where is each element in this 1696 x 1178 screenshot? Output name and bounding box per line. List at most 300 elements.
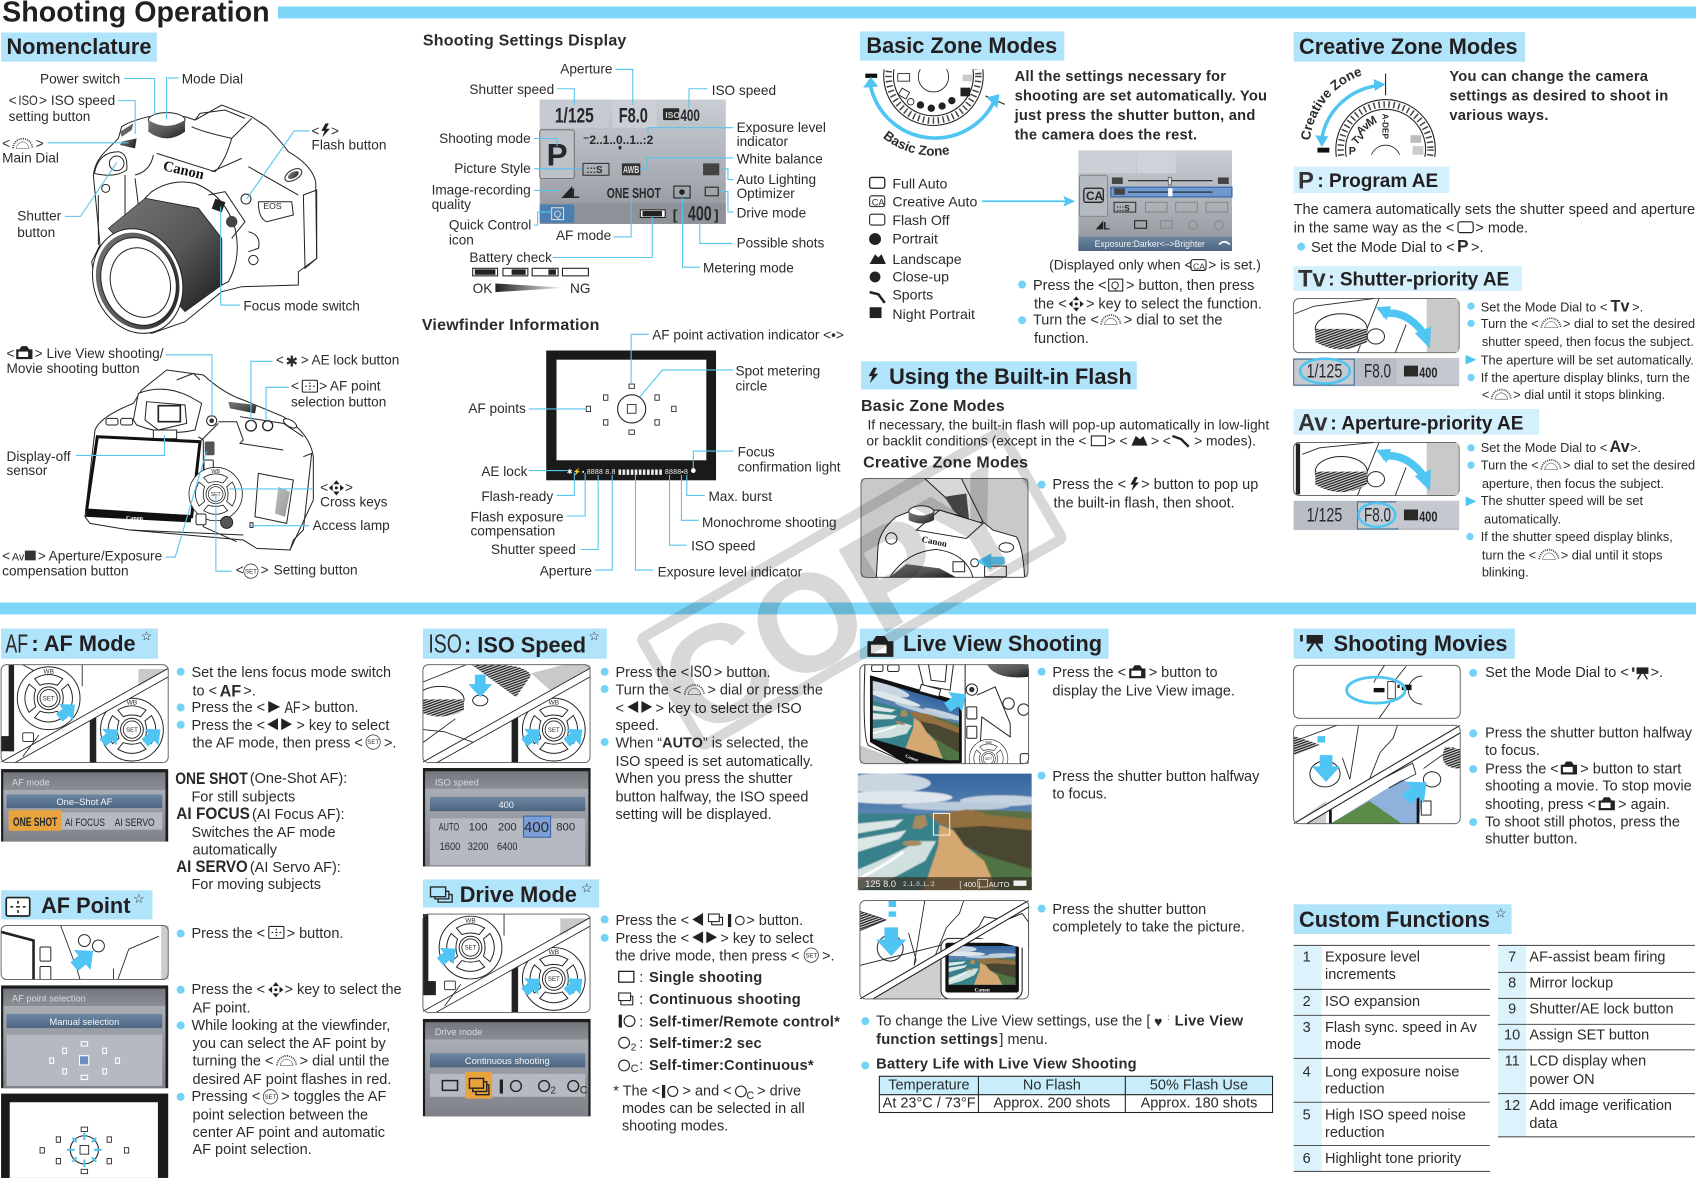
instructions bbox=[1018, 278, 1262, 347]
instructions: completely to take the picture. bbox=[1052, 919, 1245, 935]
instructions: Set the lens focus mode switch bbox=[191, 665, 391, 681]
labels: Metering mode bbox=[703, 261, 794, 276]
screen: drive mode bbox=[423, 1019, 591, 1116]
labels: indicator bbox=[737, 134, 789, 149]
labels: Max. burst bbox=[708, 489, 772, 504]
LCD screen bbox=[540, 100, 726, 226]
labels: Monochrome shooting bbox=[702, 515, 837, 530]
instructions bbox=[1469, 665, 1693, 848]
mode dial: creative zone: P bbox=[1349, 146, 1356, 158]
labels: ISO speed bbox=[712, 83, 776, 98]
labels: Aperture bbox=[540, 563, 592, 578]
labels: Battery check bbox=[469, 250, 552, 265]
instructions: > dial until the bbox=[300, 1053, 389, 1069]
instructions: Turn the < bbox=[1481, 457, 1539, 472]
instructions: Press the < bbox=[191, 700, 265, 716]
header bar bbox=[278, 7, 1696, 18]
intro text: the camera does the rest. bbox=[1015, 128, 1197, 144]
instructions: > dial to set the desired bbox=[1563, 316, 1695, 331]
labels: White balance bbox=[737, 151, 823, 166]
labels: ISO speed bbox=[51, 93, 115, 108]
screen: drive mode: 2 bbox=[551, 1086, 556, 1097]
instructions: > dial until it stops bbox=[1561, 547, 1662, 562]
instructions: To shoot still photos, press the bbox=[1485, 814, 1680, 830]
labels: AE lock bbox=[481, 464, 528, 479]
program AE: The camera automatically sets the shutter speed and aperture bbox=[1294, 202, 1695, 218]
LCD screen: 1/125 bbox=[555, 102, 594, 127]
quick control screen: L bbox=[1103, 220, 1110, 232]
instructions: > button to bbox=[1149, 665, 1218, 681]
live view photo: 2..1..0..1..:2 bbox=[903, 882, 935, 888]
instructions: >. bbox=[243, 684, 256, 700]
labels: > bbox=[319, 379, 327, 394]
instructions: turning the < bbox=[193, 1053, 273, 1069]
instructions: > key to select bbox=[296, 718, 389, 734]
table: functions 7-12: LCD display when bbox=[1529, 1053, 1646, 1069]
mode list bbox=[869, 176, 977, 323]
mode dial: creative zone: Tv bbox=[1350, 130, 1367, 148]
instructions: When you press the shutter bbox=[615, 771, 793, 787]
aperture-priority AE: : Aperture-priority AE bbox=[1330, 413, 1523, 434]
heading: live view shooting: Live View Shooting bbox=[903, 631, 1102, 656]
battery life table: 50% Flash Use bbox=[1150, 1077, 1248, 1093]
battery life table: At 23°C / 73°F bbox=[883, 1096, 976, 1112]
instructions: function. bbox=[1034, 331, 1089, 347]
table: functions 1-6: 1 bbox=[1303, 950, 1311, 966]
labels: Quick Control bbox=[449, 217, 531, 232]
heading: nomenclature: Nomenclature bbox=[6, 34, 151, 59]
viewfinder diagram: ✱⚡▪ 8888 8.8 ▮▮▮▮▮▮▮▮▮▮▮ 8888▪8 bbox=[567, 467, 688, 476]
instructions: When “AUTO” is selected, the bbox=[615, 735, 808, 751]
instructions: If the aperture display blinks, turn the bbox=[1481, 370, 1690, 385]
basic zone note: > < bbox=[1108, 433, 1128, 449]
battery life table: Approx. 200 shots bbox=[994, 1096, 1110, 1112]
LCD strip: aperture: 1/125 bbox=[1307, 504, 1342, 526]
footnote: shooting modes. bbox=[622, 1118, 728, 1134]
footnote bbox=[613, 1084, 805, 1134]
labels: < bbox=[9, 93, 17, 108]
instructions: >. bbox=[384, 735, 396, 751]
table: functions 7-12: 9 bbox=[1508, 1002, 1516, 1018]
instructions: > dial until it stops blinking. bbox=[1513, 387, 1665, 402]
AF mode descriptions: AI FOCUS bbox=[176, 805, 250, 823]
mode dial: creative zone bbox=[1301, 69, 1436, 158]
table: functions 7-12: 8 bbox=[1508, 976, 1516, 992]
table: functions 7-12: Add image verification bbox=[1529, 1098, 1672, 1114]
LCD strip: shutter speed: F8.0 bbox=[1364, 361, 1391, 383]
instructions: shooting, press < bbox=[1485, 797, 1596, 813]
labels: compensation button bbox=[2, 563, 129, 578]
LCD strip: shutter speed: 400 bbox=[1419, 365, 1437, 382]
basic zone note: If necessary, the built-in flash will pop-up automatically in low-light bbox=[867, 416, 1269, 432]
instructions: shutter button. bbox=[1485, 832, 1578, 848]
panel: creative zone modes bbox=[1293, 32, 1695, 580]
instructions: ISO bbox=[690, 663, 712, 681]
labels: Shutter speed bbox=[469, 82, 554, 97]
labels bbox=[432, 62, 826, 276]
mode list: Portrait bbox=[892, 231, 938, 247]
screen: drive mode: Drive mode bbox=[435, 1027, 482, 1037]
labels: > bbox=[331, 123, 339, 138]
table: functions 1-6: increments bbox=[1325, 967, 1396, 983]
table: functions 1-6: 6 bbox=[1303, 1151, 1311, 1167]
illustration: AF point button bbox=[1, 925, 169, 979]
instructions: Turn the < bbox=[615, 682, 681, 698]
LCD screen: AWB bbox=[623, 165, 639, 176]
leader lines bbox=[529, 334, 733, 570]
labels: > bbox=[261, 562, 269, 577]
footnote: > drive bbox=[757, 1084, 801, 1100]
battery check legend: OK bbox=[473, 281, 492, 296]
mode list: Landscape bbox=[892, 252, 962, 268]
instructions: shooting a movie. To stop movie bbox=[1485, 779, 1692, 795]
mode dial: basic zone bbox=[863, 69, 1005, 156]
screen: ISO speed: AUTO bbox=[439, 822, 459, 834]
quick control screen bbox=[1078, 150, 1232, 251]
screen: AF mode: One–Shot AF bbox=[56, 797, 113, 807]
heading: AF mode: AF bbox=[5, 630, 28, 658]
labels: > bbox=[35, 346, 43, 361]
caption: (Displayed only when < bbox=[1049, 256, 1193, 272]
labels: Main Dial bbox=[2, 150, 59, 165]
table: functions 1-6: Long exposure noise bbox=[1325, 1064, 1459, 1080]
labels: Focus bbox=[738, 445, 775, 460]
battery check legend bbox=[473, 268, 590, 296]
heading: AF point bbox=[1, 890, 153, 919]
instructions: > dial to set the desired bbox=[1563, 457, 1695, 472]
instructions: > key to select the function. bbox=[1086, 296, 1262, 312]
labels: Auto Lighting bbox=[737, 172, 816, 187]
labels: Av bbox=[12, 551, 25, 563]
mode list: Sports bbox=[892, 288, 933, 304]
labels: < bbox=[276, 353, 284, 368]
screen: ISO speed: 200 bbox=[498, 822, 517, 834]
screen: ISO speed: 1600 bbox=[440, 841, 460, 853]
screen: ISO speed: 100 bbox=[469, 822, 488, 834]
labels: AF mode bbox=[556, 228, 611, 243]
panel: using the built-in flash bbox=[861, 361, 1269, 577]
instructions: AF point. bbox=[193, 1000, 250, 1016]
rear camera illustration: Canon bbox=[126, 516, 144, 522]
live view photo: 125 8.0 bbox=[865, 879, 896, 889]
drive mode list: 2 bbox=[631, 1042, 637, 1053]
screen: drive mode: Continuous shooting bbox=[465, 1056, 550, 1066]
labels: Power switch bbox=[40, 71, 120, 86]
labels: Movie shooting button bbox=[6, 361, 140, 376]
drive mode list: : bbox=[639, 1015, 643, 1031]
shutter-priority AE: Tv bbox=[1298, 266, 1326, 293]
screen: AF point selection bbox=[1, 985, 168, 1088]
illustration: cross keys bbox=[423, 914, 591, 1012]
instructions: > toggles the AF bbox=[281, 1089, 386, 1105]
table: functions 1-6 bbox=[1294, 945, 1490, 1171]
mode dial: basic zone: Basic Zone bbox=[883, 130, 950, 156]
instructions: blinking. bbox=[1482, 565, 1529, 580]
labels: Flash button bbox=[312, 137, 386, 152]
live view settings note: Live View bbox=[1175, 1013, 1244, 1029]
table: functions 1-6: reduction bbox=[1325, 1125, 1385, 1141]
LCD strip: aperture: F8.0 bbox=[1364, 504, 1391, 526]
heading: creative zone modes: Creative Zone Modes bbox=[1299, 34, 1518, 59]
labels: Exposure level indicator bbox=[658, 565, 803, 580]
table: functions 1-6: mode bbox=[1325, 1037, 1361, 1053]
LCD strip: aperture: 400 bbox=[1419, 508, 1437, 525]
table: functions 7-12: 12 bbox=[1504, 1098, 1520, 1114]
shutter-priority AE bbox=[1294, 266, 1695, 402]
battery life table: No Flash bbox=[1023, 1077, 1081, 1093]
live view settings note: : bbox=[1167, 1012, 1169, 1022]
live view settings note: To change the Live View settings, use the [ bbox=[876, 1013, 1150, 1029]
screen: ISO speed bbox=[423, 768, 591, 866]
intro text: just press the shutter button, and bbox=[1014, 108, 1256, 124]
mode list: Night Portrait bbox=[892, 307, 975, 323]
mode dial: creative zone: M bbox=[1364, 113, 1379, 130]
watermark: COPY: COPY bbox=[636, 437, 1053, 767]
instructions: Turn the < bbox=[1481, 316, 1539, 331]
panel: shooting movies bbox=[1294, 628, 1693, 848]
labels: Shutter speed bbox=[491, 542, 576, 557]
labels: < bbox=[2, 136, 10, 151]
instructions: Press the < bbox=[615, 665, 689, 681]
LCD screen: :::S bbox=[586, 165, 603, 176]
table: functions 1-6: 5 bbox=[1303, 1108, 1311, 1124]
instructions: AF bbox=[220, 683, 241, 701]
instructions: >. bbox=[1632, 300, 1643, 315]
screen: AF mode: AI FOCUS bbox=[65, 817, 105, 829]
labels: Aperture/Exposure bbox=[49, 548, 162, 563]
instructions: > dial or press the bbox=[707, 682, 823, 698]
instructions: Q bbox=[1111, 280, 1119, 292]
labels: < bbox=[236, 562, 244, 577]
heading: basic zone modes: Basic Zone Modes bbox=[866, 33, 1057, 58]
live view settings note: function settings bbox=[876, 1032, 998, 1048]
LCD screen: F8.0 bbox=[619, 102, 648, 127]
instructions: Av bbox=[1609, 438, 1630, 456]
illustration: press shutter: Canon bbox=[975, 987, 990, 993]
illustration: press shutter bbox=[860, 901, 1029, 999]
labels: ISO bbox=[18, 93, 38, 108]
drive mode list: : bbox=[639, 970, 643, 986]
instructions: the AF mode, then press < bbox=[193, 735, 363, 751]
heading: drive mode bbox=[423, 879, 599, 908]
screen: drive mode: C bbox=[580, 1085, 588, 1097]
heading: AF mode: ☆ bbox=[141, 628, 152, 643]
labels: Spot metering bbox=[736, 363, 820, 378]
labels: sensor bbox=[6, 463, 48, 478]
illustration: ISO button bbox=[416, 665, 591, 763]
mode list: CA bbox=[872, 198, 885, 208]
program AE: in the same way as the < bbox=[1294, 221, 1454, 237]
intro text: You can change the camera bbox=[1449, 69, 1649, 85]
heading: shooting movies: Shooting Movies bbox=[1334, 631, 1508, 656]
mode list: Full Auto bbox=[892, 176, 948, 192]
labels: > bbox=[39, 93, 47, 108]
labels: > bbox=[301, 353, 309, 368]
labels: > bbox=[38, 548, 46, 563]
instructions: display the Live View image. bbox=[1052, 684, 1235, 700]
labels: Shooting mode bbox=[439, 131, 531, 146]
instructions: > button, then press bbox=[1126, 278, 1254, 294]
instructions: If the shutter speed display blinks, bbox=[1481, 529, 1673, 544]
instructions: Press the < bbox=[1485, 761, 1559, 777]
labels: Image-recording bbox=[432, 183, 531, 198]
basic zone note: > modes). bbox=[1194, 433, 1256, 449]
instructions: > button. bbox=[302, 700, 359, 716]
leader lines bbox=[48, 78, 314, 571]
labels bbox=[468, 328, 844, 580]
illustration: cross keys bbox=[1, 665, 169, 763]
table: functions 1-6: High ISO speed noise bbox=[1325, 1108, 1466, 1124]
program AE: P bbox=[1298, 167, 1314, 194]
LCD screen: 400 bbox=[680, 107, 700, 125]
instructions bbox=[1038, 665, 1260, 935]
instructions: button halfway, the ISO speed bbox=[615, 790, 808, 806]
AF mode descriptions: ONE SHOT bbox=[175, 770, 248, 788]
front camera illustration bbox=[78, 105, 317, 346]
table: functions 1-6: 4 bbox=[1303, 1064, 1311, 1080]
LCD screen: ⁻2..1..0..1..:2 bbox=[583, 133, 654, 147]
table: functions 1-6: ISO expansion bbox=[1325, 994, 1420, 1010]
instructions: Press the < bbox=[615, 913, 689, 929]
LCD screen: P bbox=[547, 138, 568, 173]
instructions: Turn the < bbox=[1033, 313, 1099, 329]
program AE: Set the Mode Dial to < bbox=[1311, 240, 1455, 256]
AF mode descriptions bbox=[175, 770, 347, 893]
labels: icon bbox=[449, 233, 474, 248]
illustration: live view button: Canon bbox=[904, 754, 919, 764]
LCD screen: Q bbox=[554, 209, 562, 220]
instructions: Pressing < bbox=[191, 1089, 260, 1105]
labels: circle bbox=[736, 379, 767, 394]
instructions: >. bbox=[1651, 665, 1663, 681]
battery life table: Battery Life with Live View Shooting bbox=[876, 1057, 1137, 1073]
viewfinder diagram bbox=[546, 350, 716, 480]
table: functions 7-12 bbox=[1498, 945, 1695, 1137]
labels: ✱ bbox=[286, 354, 298, 371]
heading: shooting movies bbox=[1294, 628, 1515, 659]
drive mode list: Self-timer:2 sec bbox=[649, 1036, 762, 1052]
labels: Aperture bbox=[560, 62, 612, 77]
heading: drive mode: ☆ bbox=[581, 880, 592, 895]
intro text: various ways. bbox=[1449, 108, 1549, 124]
labels: Possible shots bbox=[737, 236, 825, 251]
AF mode descriptions: automatically bbox=[193, 843, 278, 859]
aperture-priority AE bbox=[1294, 409, 1695, 580]
drive mode list: Self-timer/Remote control* bbox=[649, 1015, 840, 1031]
labels: Shutter bbox=[17, 209, 62, 224]
instructions: point selection between the bbox=[193, 1108, 368, 1124]
labels: Mode Dial bbox=[182, 71, 243, 86]
labels: confirmation light bbox=[738, 460, 841, 475]
illustration: mode dial bbox=[1294, 665, 1460, 718]
table: functions 1-6: Flash sync. speed in Av bbox=[1325, 1020, 1478, 1036]
LCD strip: shutter speed bbox=[1294, 358, 1459, 386]
instructions: > key to select the ISO bbox=[655, 701, 802, 717]
instruction: the built-in flash, then shoot. bbox=[1054, 495, 1235, 511]
labels bbox=[2, 71, 399, 578]
caption bbox=[1049, 256, 1261, 272]
AF mode descriptions: AI SERVO bbox=[176, 858, 248, 876]
illustration: popped-up flash: Canon bbox=[921, 534, 948, 549]
panel: live view shooting bbox=[839, 628, 1273, 1113]
intro text: settings as desired to shoot in bbox=[1449, 89, 1669, 105]
instructions: < bbox=[1482, 387, 1489, 402]
LCD screen: 400 bbox=[688, 201, 712, 226]
live view photo bbox=[839, 773, 1043, 890]
quick control screen: Exposure:Darker<–>Brighter bbox=[1095, 239, 1205, 249]
labels: Exposure level bbox=[737, 120, 826, 135]
instructions: < bbox=[615, 701, 624, 717]
intro text: shooting are set automatically. You bbox=[1015, 89, 1267, 105]
program AE: > mode. bbox=[1475, 221, 1528, 237]
labels: AF point activation indicator <•> bbox=[652, 328, 844, 343]
instructions: The aperture will be set automatically. bbox=[1481, 353, 1694, 368]
mode dial: creative zone: A-DEP bbox=[1380, 114, 1389, 139]
basic zone note: > < bbox=[1151, 433, 1171, 449]
instructions: Set the Mode Dial to < bbox=[1481, 440, 1607, 455]
illustration: start recording bbox=[1294, 725, 1460, 824]
labels: AE lock button bbox=[312, 353, 399, 368]
shutter-priority AE: : Shutter-priority AE bbox=[1328, 270, 1509, 291]
table: functions 7-12: Shutter/AE lock button bbox=[1529, 1002, 1674, 1018]
panel: AF mode bbox=[1, 628, 396, 893]
instruction: Press the < bbox=[1052, 477, 1126, 493]
instructions bbox=[601, 663, 823, 823]
panel: viewfinder information bbox=[422, 317, 844, 580]
instructions: speed. bbox=[615, 718, 659, 734]
instructions: shutter speed, then focus the subject. bbox=[1482, 334, 1694, 349]
instructions: automatically. bbox=[1484, 512, 1561, 527]
drive mode list: Single shooting bbox=[649, 970, 762, 986]
table: functions 7-12: data bbox=[1529, 1116, 1559, 1132]
instructions: > again. bbox=[1618, 797, 1670, 813]
drive mode list: : bbox=[639, 1058, 643, 1074]
instructions: While looking at the viewfinder, bbox=[191, 1018, 390, 1034]
screen: AF mode: ONE SHOT bbox=[13, 815, 58, 829]
labels: > bbox=[345, 480, 353, 495]
footnote: C bbox=[746, 1090, 754, 1102]
instructions: > dial to set the bbox=[1124, 313, 1222, 329]
caption: CA bbox=[1193, 261, 1205, 271]
mode dial: creative zone: Av bbox=[1354, 120, 1372, 138]
screen: AF mode: AF mode bbox=[12, 777, 50, 787]
instructions: center AF point and automatic bbox=[193, 1125, 385, 1141]
instructions: >. bbox=[822, 949, 835, 965]
caption: > is set.) bbox=[1208, 256, 1261, 272]
instructions: to focus. bbox=[1052, 786, 1107, 802]
battery life table: Temperature bbox=[888, 1077, 970, 1093]
LCD screen: [ bbox=[673, 207, 678, 223]
instructions: Press the < bbox=[191, 718, 265, 734]
table: functions 7-12: power ON bbox=[1529, 1072, 1595, 1088]
instructions: AF bbox=[284, 699, 301, 717]
instructions bbox=[1466, 298, 1695, 402]
labels: Flash exposure bbox=[471, 509, 564, 524]
illustration: live view button bbox=[859, 664, 1030, 764]
table: functions 1-6: 3 bbox=[1303, 1020, 1311, 1036]
instructions: Set the Mode Dial to < bbox=[1485, 665, 1629, 681]
heading: ISO speed: ISO bbox=[428, 630, 462, 658]
labels: Display-off bbox=[6, 449, 71, 464]
table: functions 7-12: AF-assist beam firing bbox=[1529, 950, 1665, 966]
labels: Drive mode bbox=[737, 205, 806, 220]
labels: AF points bbox=[468, 401, 526, 416]
LCD screen: ISO bbox=[665, 110, 680, 120]
instructions: you can select the AF point by bbox=[193, 1036, 387, 1052]
instructions: Press the < bbox=[191, 926, 265, 942]
intro text bbox=[1014, 69, 1267, 144]
labels: button bbox=[17, 225, 55, 240]
